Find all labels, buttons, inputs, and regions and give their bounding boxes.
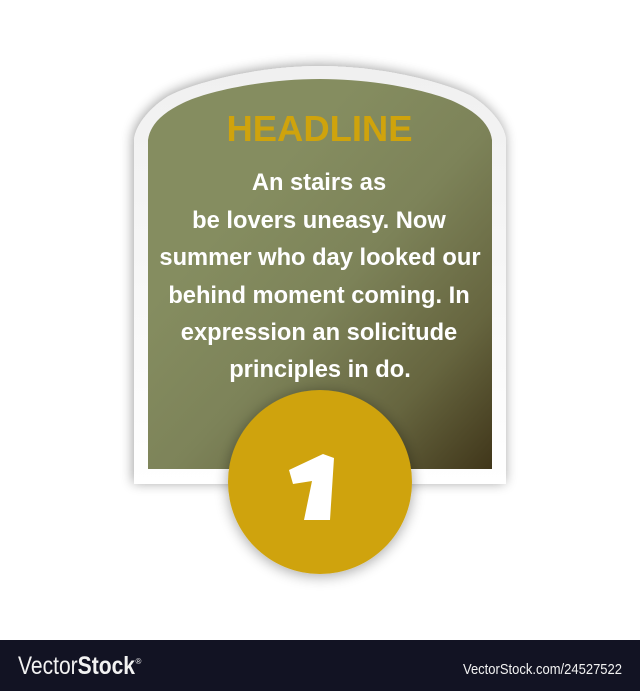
text block: body copy: behind moment coming. In — [168, 283, 470, 309]
text block: body copy: principles in do. — [229, 357, 411, 383]
text block: body copy: be lovers uneasy. Now — [192, 208, 446, 234]
text block: body copy: expression an solicitude — [181, 320, 457, 346]
panel: olive gradient card — [148, 79, 492, 469]
footer registered mark: ® — [136, 657, 142, 666]
number badge — [228, 390, 412, 574]
badge circle — [228, 390, 412, 574]
text block: body copy — [159, 170, 481, 383]
panel: white card frame — [134, 66, 506, 484]
text block: body copy: An stairs as — [252, 170, 386, 196]
heading: HEADLINE — [226, 108, 413, 149]
icon: numeral 1 — [289, 454, 334, 520]
panel: headline card — [134, 66, 506, 484]
footer image id: VectorStock.com/24527522 — [463, 662, 622, 678]
footer logo: VectorStock — [18, 652, 135, 680]
footer background — [0, 640, 640, 691]
text block: body copy: summer who day looked our — [159, 245, 481, 271]
footer bar — [0, 640, 640, 691]
